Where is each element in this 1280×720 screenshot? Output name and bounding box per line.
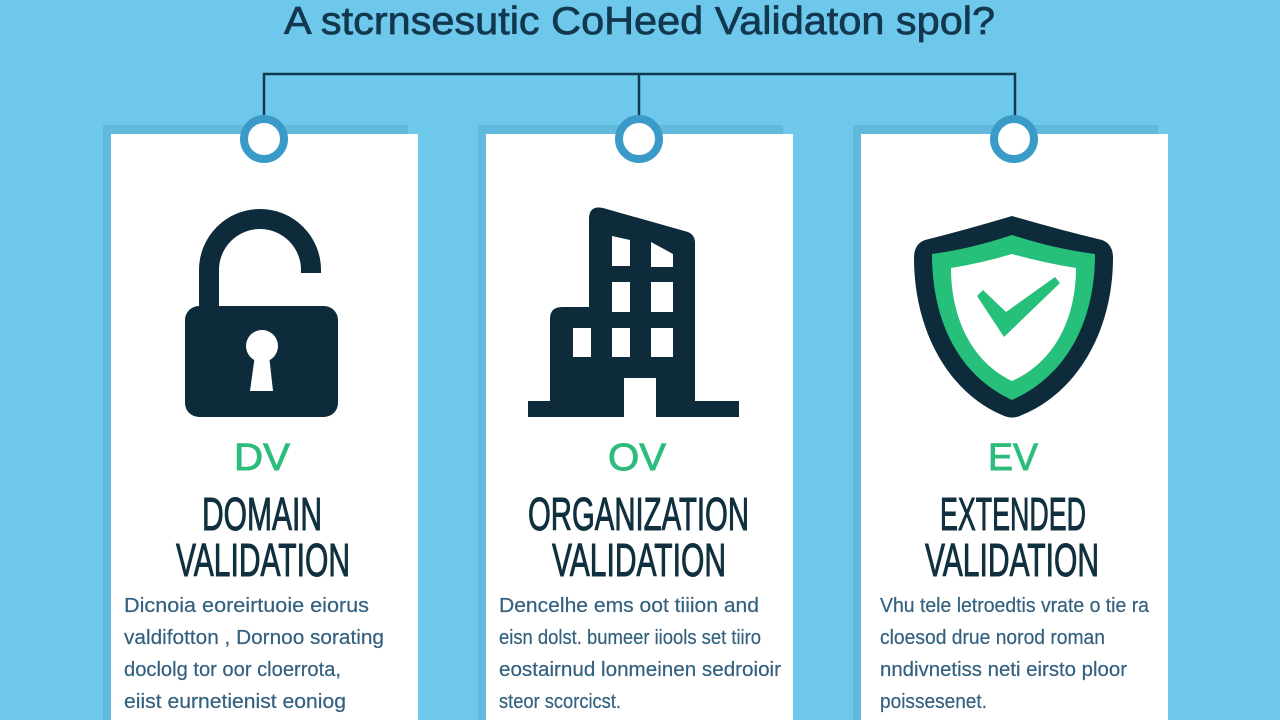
- description: organization validation: Dencelhe ems oot tiiion and: [499, 595, 759, 617]
- heading: extended validation: VALIDATION: [925, 534, 1099, 586]
- description: organization validation: eisn dolst. bumeer iiools set tiiro: [499, 627, 761, 649]
- icon: open padlock: [185, 219, 338, 417]
- description: extended validation: [880, 595, 1150, 713]
- heading: extended validation: [925, 488, 1099, 586]
- description: extended validation: poissesenet.: [880, 691, 987, 713]
- heading: domain validation: [176, 488, 350, 586]
- connector ring: DV: [244, 119, 284, 159]
- description: extended validation: cloesod drue norod roman: [880, 627, 1105, 649]
- description: domain validation: [124, 595, 384, 713]
- heading: organization validation: ORGANIZATION: [528, 488, 749, 540]
- heading: domain validation: VALIDATION: [176, 534, 350, 586]
- description: domain validation: eiist eurnetienist eoniog: [124, 691, 346, 713]
- panel: organization validation: [478, 119, 793, 720]
- heading: organization validation: [528, 488, 749, 586]
- connector ring: OV: [619, 119, 659, 159]
- connector lines: [264, 74, 1015, 116]
- heading: organization validation: VALIDATION: [552, 534, 726, 586]
- title: A stcrnsesutic CoHeed Validaton spol?: [284, 0, 995, 43]
- panel: extended validation: [853, 119, 1168, 720]
- description: extended validation: nndivnetiss neti eirsto ploor: [880, 659, 1127, 681]
- description: organization validation: eostairnud lonmeinen sedroioir: [499, 659, 781, 681]
- label: EV: EV: [988, 437, 1039, 479]
- icon: office building: [528, 207, 739, 417]
- label: DV: DV: [234, 437, 291, 479]
- description: domain validation: doclolg tor oor cloerrota,: [124, 659, 341, 681]
- label: OV: OV: [608, 437, 667, 479]
- description: organization validation: steor scorcicst.: [499, 691, 621, 713]
- description: extended validation: Vhu tele letroedtis vrate o tie ra: [880, 595, 1150, 617]
- panel: domain validation: [103, 119, 418, 720]
- icon: shield with check mark: [914, 216, 1113, 418]
- description: organization validation: [499, 595, 781, 713]
- heading: domain validation: DOMAIN: [202, 488, 322, 540]
- connector ring: EV: [994, 119, 1034, 159]
- heading: extended validation: EXTENDED: [940, 488, 1086, 540]
- description: domain validation: Dicnoia eoreirtuoie eiorus: [124, 595, 369, 617]
- description: domain validation: valdifotton , Dornoo sorating: [124, 627, 384, 649]
